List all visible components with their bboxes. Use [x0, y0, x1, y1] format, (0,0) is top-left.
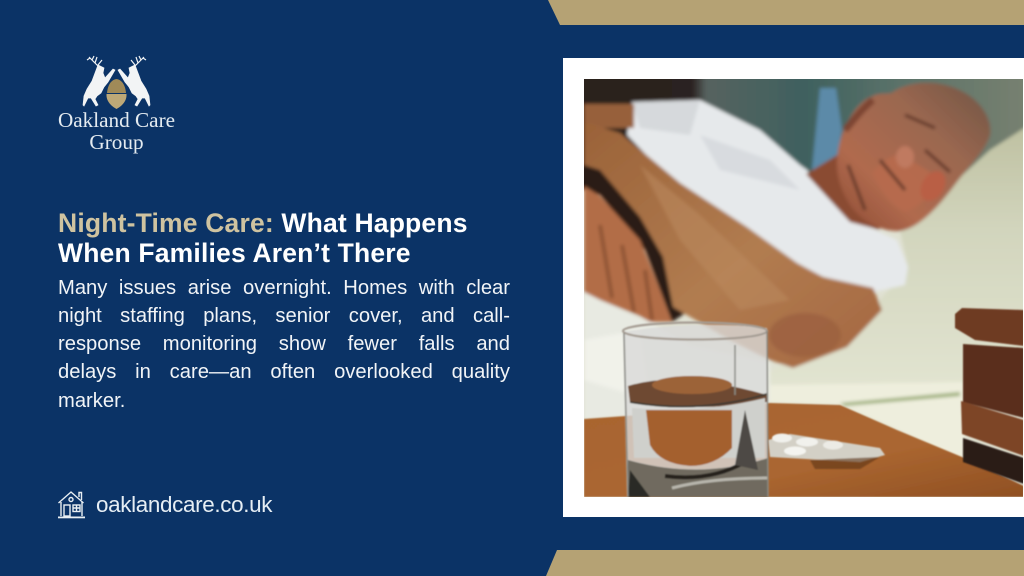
icon: house — [58, 491, 85, 518]
body text: delays in care—an often overlooked quality — [58, 361, 510, 383]
photo panel with white frame — [563, 58, 1024, 517]
lower hand — [584, 186, 672, 322]
body text: Many issues arise overnight. Homes with clear — [58, 276, 510, 298]
gold band: top — [548, 0, 1024, 25]
gold band: bottom — [546, 550, 1024, 576]
shirt — [627, 100, 908, 292]
body text: response monitoring show fewer falls and — [58, 333, 510, 355]
logo — [58, 56, 175, 154]
forearm — [584, 122, 882, 368]
wall background — [570, 70, 1024, 190]
title: When Families Aren’t There — [58, 238, 411, 268]
body text: night staffing plans, senior cover, and call- — [58, 305, 510, 327]
icon: stags and acorn crest — [82, 56, 150, 109]
body text: marker. — [58, 390, 125, 412]
pillow — [770, 118, 1024, 400]
title: Night-Time Care: What Happens — [58, 208, 468, 238]
table — [584, 403, 1024, 497]
title — [58, 208, 468, 268]
left sheet — [584, 292, 770, 420]
logo wordmark: Group — [89, 130, 144, 154]
neck — [806, 152, 880, 230]
shadow between arm and hand — [584, 165, 690, 322]
head — [837, 83, 990, 231]
logo wordmark — [58, 108, 175, 154]
bedsheet — [770, 382, 965, 462]
glass — [623, 322, 768, 497]
website url: oaklandcare.co.uk — [96, 492, 272, 517]
body text — [58, 276, 510, 412]
logo wordmark: Oakland Care — [58, 108, 175, 132]
pills — [768, 434, 885, 469]
nightstand — [955, 308, 1024, 484]
photo: elderly man asleep with water glass and pills — [584, 79, 1023, 497]
cuff of upper hand — [584, 104, 634, 128]
